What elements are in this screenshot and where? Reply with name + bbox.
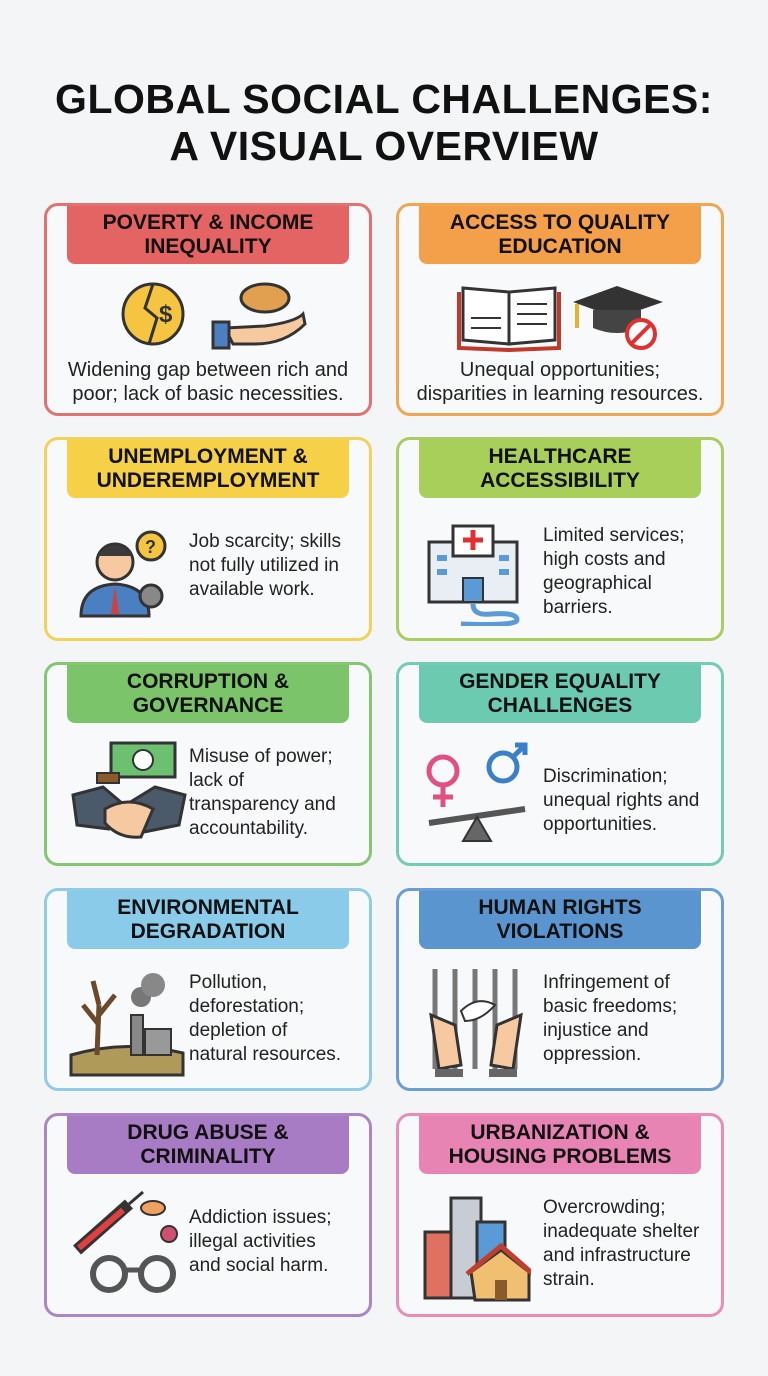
panel: education (396, 203, 724, 416)
text: human rights (543, 972, 677, 1065)
title: GLOBAL SOCIAL CHALLENGES: (55, 76, 713, 122)
icon: hands bars dove (429, 969, 523, 1077)
header: unemployment (67, 440, 349, 498)
text: education: Unequal opportunities; (460, 359, 660, 381)
header: drugs (67, 1116, 349, 1174)
text: urbanization (543, 1197, 699, 1290)
text: human rights: basic freedoms; (543, 996, 677, 1017)
header: drugs: DRUG ABUSE & (127, 1121, 289, 1144)
text: healthcare (543, 525, 684, 618)
header: urbanization: URBANIZATION & (470, 1121, 650, 1144)
text: healthcare: geographical (543, 573, 652, 594)
header: human rights (419, 891, 701, 949)
text: corruption: accountability. (189, 818, 308, 839)
text: drugs: illegal activities (189, 1231, 316, 1252)
header: healthcare (419, 440, 701, 498)
text: poverty: poor; lack of basic necessities. (72, 383, 344, 405)
text: environment: natural resources. (189, 1044, 341, 1065)
text: healthcare: Limited services; (543, 525, 684, 546)
text: gender (543, 766, 699, 835)
text: corruption: Misuse of power; (189, 746, 333, 767)
text: poverty (68, 359, 348, 405)
text: urbanization: Overcrowding; (543, 1197, 666, 1218)
title (55, 76, 713, 169)
header: education: ACCESS TO QUALITY (450, 211, 670, 234)
panel: gender (396, 662, 724, 866)
text: healthcare: high costs and (543, 549, 666, 570)
panel: healthcare (396, 437, 724, 641)
text: environment: Pollution, (189, 972, 267, 993)
text: corruption (189, 746, 336, 839)
panel: drugs (44, 1113, 372, 1317)
text: human rights: injustice and (543, 1020, 649, 1041)
header: gender: GENDER EQUALITY (459, 670, 661, 693)
header: poverty: INEQUALITY (144, 235, 272, 258)
text: unemployment: not fully utilized in (189, 555, 339, 576)
header: environment: DEGRADATION (131, 920, 285, 943)
header: education: EDUCATION (498, 235, 622, 258)
text: education: disparities in learning resources. (417, 383, 703, 405)
icon: hospital (428, 524, 520, 626)
header: urbanization (419, 1116, 701, 1174)
text: drugs: Addiction issues; (189, 1207, 332, 1228)
panel: corruption (44, 662, 372, 866)
header: poverty: POVERTY & INCOME (103, 211, 313, 234)
text: urbanization: and infrastructure (543, 1245, 691, 1266)
text: urbanization: inadequate shelter (543, 1221, 699, 1242)
text: healthcare: barriers. (543, 597, 613, 618)
header: corruption: CORRUPTION & (127, 670, 289, 693)
title: A VISUAL OVERVIEW (169, 123, 599, 169)
header: human rights: VIOLATIONS (497, 920, 623, 943)
panel: urbanization (396, 1113, 724, 1317)
text: gender: Discrimination; (543, 766, 668, 787)
header: healthcare: HEALTHCARE (488, 445, 632, 468)
icon: worker (80, 530, 166, 618)
header: environment: ENVIRONMENTAL (117, 896, 299, 919)
text: unemployment: available work. (189, 579, 315, 600)
text: human rights: oppression. (543, 1044, 641, 1065)
text: corruption: transparency and (189, 794, 336, 815)
icon: syringe pills handcuffs (73, 1191, 178, 1293)
text: drugs (189, 1207, 332, 1276)
icon: book and cap (457, 286, 663, 352)
text: education (417, 359, 703, 405)
text: environment: deforestation; (189, 996, 304, 1017)
text: corruption: lack of (189, 770, 244, 791)
panel: unemployment (44, 437, 372, 641)
header: poverty (67, 206, 349, 264)
icon: city buildings (424, 1196, 531, 1302)
text: unemployment: Job scarcity; skills (189, 531, 341, 552)
icon: worker: ? (145, 537, 156, 557)
text: drugs: and social harm. (189, 1255, 328, 1276)
header: gender: CHALLENGES (488, 694, 632, 717)
icon: dead tree factory (70, 973, 184, 1076)
header: education (419, 206, 701, 264)
header: urbanization: HOUSING PROBLEMS (449, 1145, 671, 1168)
panel: environment (44, 888, 372, 1091)
text: unemployment (189, 531, 341, 600)
header: drugs: CRIMINALITY (140, 1145, 276, 1168)
icon: handshake money (71, 742, 187, 839)
text: human rights: Infringement of (543, 972, 670, 993)
header: corruption: GOVERNANCE (133, 694, 283, 717)
header: gender (419, 665, 701, 723)
text: poverty: Widening gap between rich and (68, 359, 348, 381)
icon: gender symbols on scale (426, 742, 528, 842)
text: gender: opportunities. (543, 814, 657, 835)
header: environment (67, 891, 349, 949)
header: healthcare: ACCESSIBILITY (480, 469, 640, 492)
header: corruption (67, 665, 349, 723)
icon: broken coin and hand (122, 282, 307, 350)
panel: human rights (396, 888, 724, 1091)
icon: broken coin and hand: $ (159, 301, 173, 328)
text: environment (189, 972, 341, 1065)
header: unemployment: UNDEREMPLOYMENT (97, 469, 319, 492)
panel: poverty (44, 203, 372, 416)
text: gender: unequal rights and (543, 790, 699, 811)
header: human rights: HUMAN RIGHTS (478, 896, 642, 919)
text: environment: depletion of (189, 1020, 287, 1041)
header: unemployment: UNEMPLOYMENT & (108, 445, 308, 468)
text: urbanization: strain. (543, 1269, 595, 1290)
